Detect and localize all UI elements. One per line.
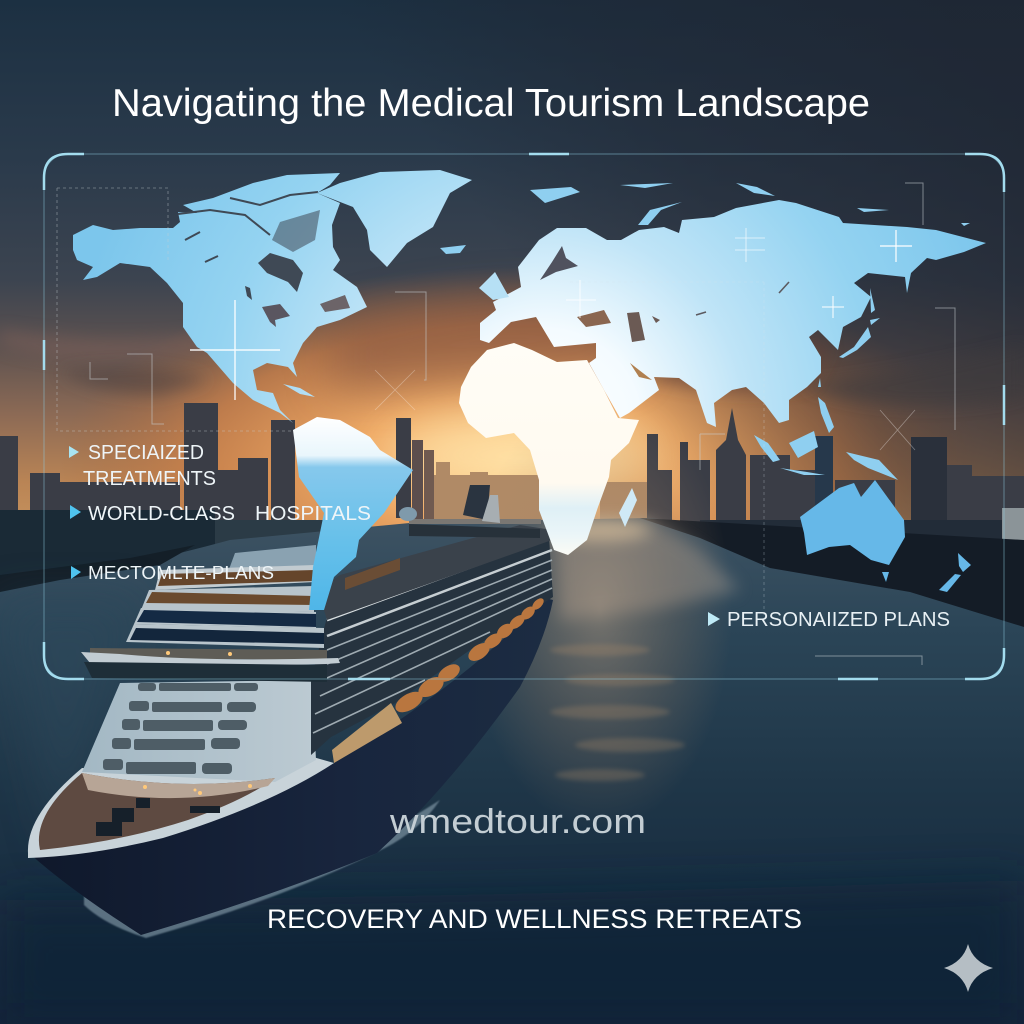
ship upper decks [318,525,552,620]
hud frame [44,154,1004,679]
ship funnel [463,485,490,520]
new zealand [939,553,971,592]
europe and asia [480,200,986,427]
icon: sparkle [944,944,993,992]
water glints [550,644,685,781]
title: Navigating the Medical Tourism Landscape [112,82,870,125]
label: world-class hospitals [70,503,371,525]
label: world-class hospitals: HOSPITALS [255,503,371,525]
white gunwale [28,757,334,858]
australia [800,480,905,565]
arctic and island groups [440,183,970,480]
ship lit promenade [332,703,402,763]
cruise ship [28,485,553,938]
label: specialized treatments: TREATMENTS [83,468,216,490]
ship white front [82,680,316,782]
label: mectomlte plans: MECTOMLTE-PLANS [88,563,274,583]
north america seas and lakes [245,210,350,327]
ship lifeboats [392,596,546,716]
greenland [317,170,472,267]
label: specialized treatments: SPECIAIZED [88,442,204,464]
label: specialized treatments [69,442,216,490]
label: world-class hospitals: WORLD-CLASS [88,503,235,525]
north america [73,173,367,423]
tasmania [882,572,889,582]
ship balcony side [311,537,553,755]
footer caption: RECOVERY AND WELLNESS RETREATS [267,904,802,934]
madagascar [619,488,637,527]
water [0,400,1024,1024]
ship hull [29,598,553,935]
world map [73,170,986,610]
south america [293,417,413,610]
ship front windows [103,683,258,774]
ship upper front tiers [228,545,316,572]
africa [459,343,639,555]
ship bow deck [39,773,275,850]
ship deck lights [143,651,252,795]
ship wake [84,800,440,938]
background: sunset sky [0,0,1024,560]
caribbean islands [283,384,315,397]
website url: wmedtour.com [389,803,646,841]
city skyline [0,403,1024,580]
label: personalized plans: PERSONAIIZED PLANS [727,609,950,631]
map sparkles [190,228,915,450]
inland seas [540,246,660,380]
